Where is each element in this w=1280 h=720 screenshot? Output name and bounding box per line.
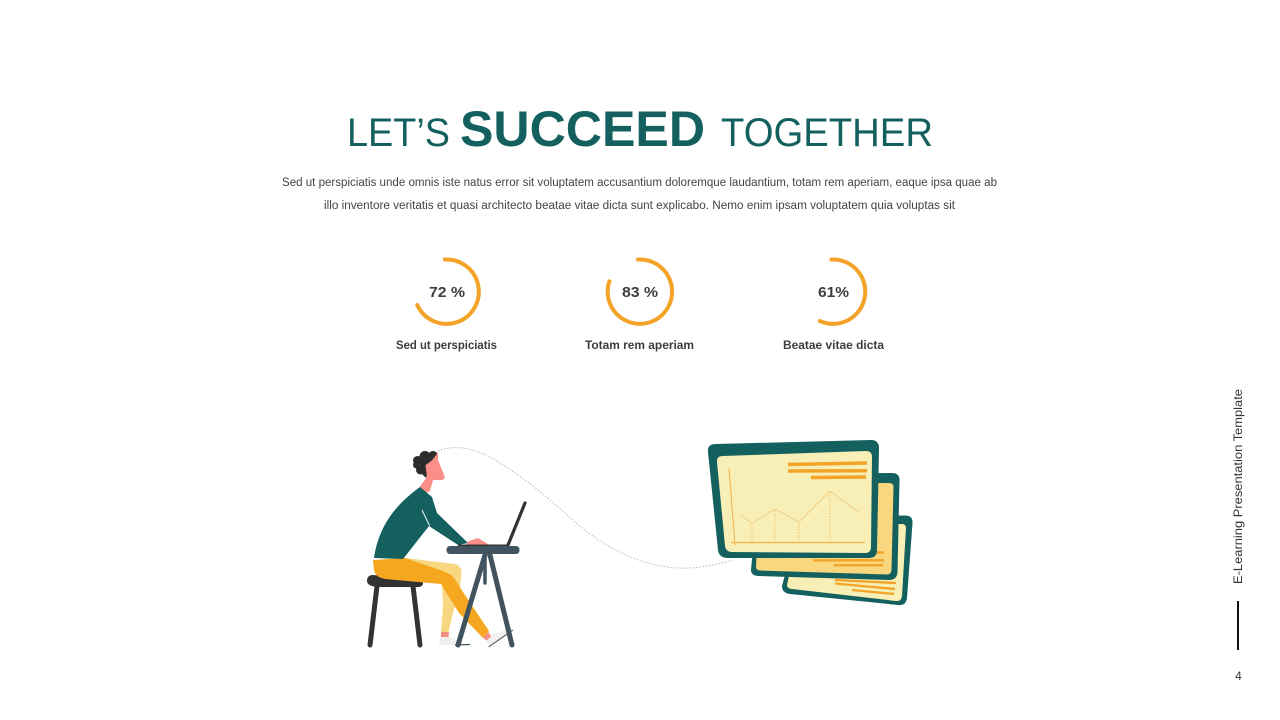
title: TOGETHER	[721, 111, 933, 155]
card text bars	[788, 463, 867, 478]
front shoe	[486, 628, 513, 646]
hand	[466, 538, 489, 546]
sweater	[374, 487, 468, 559]
dotted connector curve	[438, 448, 732, 568]
stat: 83 percent: 83 %	[622, 284, 658, 301]
title: SUCCEED	[460, 101, 705, 157]
line chart	[729, 468, 865, 545]
title	[347, 101, 933, 157]
stat: 72 percent	[396, 259, 497, 352]
stat: 61 percent: 61%	[818, 284, 849, 301]
intro text block: illo inventore veritatis et quasi architecto beatae vitae dicta sunt explicabo. Nemo enim ipsam voluptatem quia voluptas sit	[324, 200, 956, 212]
stat: 72 percent: Sed ut perspiciatis	[396, 338, 497, 352]
stool	[367, 575, 423, 645]
intro text block: Sed ut perspiciatis unde omnis iste natus error sit voluptatem accusantium doloremque laudantium, totam rem aperiam, eaque ipsa quae ab	[282, 177, 997, 189]
page number: 4	[1235, 669, 1242, 683]
stat: 61 percent: Beatae vitae dicta	[783, 338, 884, 352]
neck and head	[420, 452, 445, 494]
back card	[782, 516, 913, 605]
stat: 61 percent	[783, 259, 884, 352]
stat: 83 percent	[585, 259, 694, 352]
sidebar label: E-Learning Presentation Template	[1231, 389, 1245, 584]
laptop	[458, 503, 525, 546]
back leg	[405, 558, 462, 632]
title: LET’S	[347, 111, 450, 155]
stat: 72 percent: 72 %	[429, 284, 465, 301]
middle card	[751, 473, 900, 580]
hair	[413, 451, 438, 478]
back shoe	[439, 636, 465, 645]
front card	[708, 440, 879, 558]
front leg	[373, 558, 489, 638]
stat: 83 percent: Totam rem aperiam	[585, 338, 694, 352]
illustration: person at laptop	[367, 451, 525, 647]
illustration: stacked chart cards	[708, 440, 913, 605]
intro text block	[282, 177, 997, 212]
table	[446, 546, 520, 645]
sidebar rule	[1237, 601, 1239, 650]
